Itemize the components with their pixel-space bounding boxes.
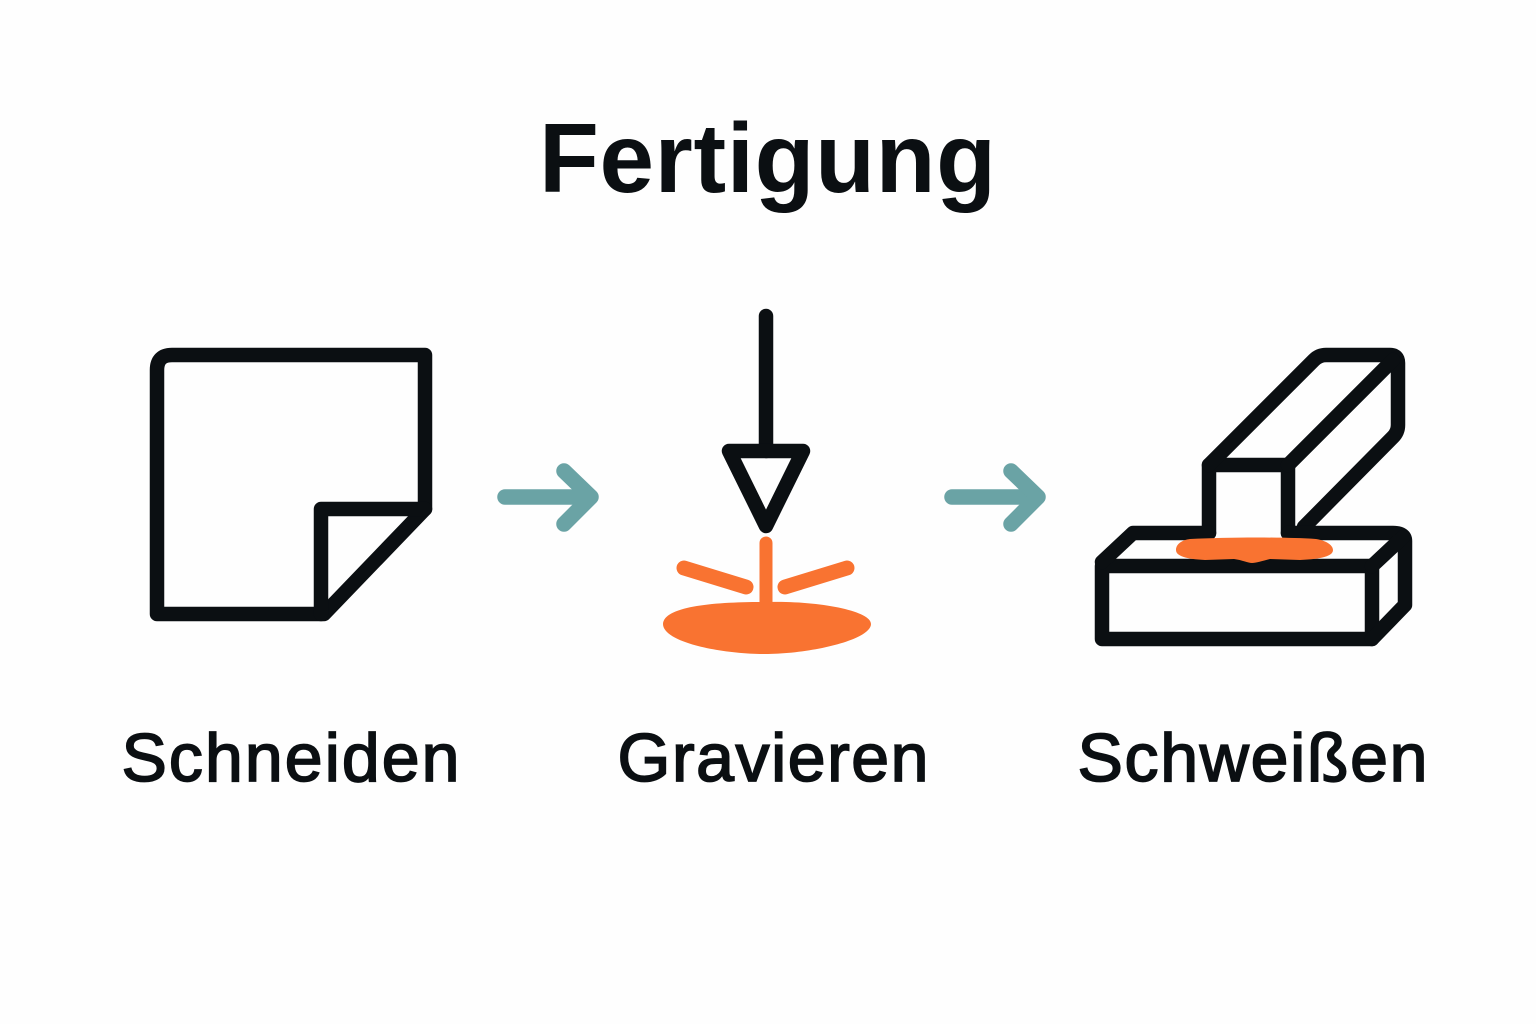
arrow: Gravieren to Schweißen bbox=[952, 471, 1038, 524]
lower block bbox=[1102, 533, 1405, 639]
icon: engraving tool with orange sparks bbox=[663, 316, 871, 654]
label: Schweißen: Schweißen bbox=[1078, 720, 1428, 796]
title: Fertigung bbox=[539, 103, 996, 213]
icon: cut sheet with folded corner bbox=[157, 355, 425, 614]
upper bar bbox=[1209, 355, 1398, 533]
label: Schneiden: Schneiden bbox=[122, 720, 460, 796]
engraving tool arrow bbox=[729, 316, 803, 526]
icon: welding two metal blocks bbox=[1102, 355, 1405, 639]
label: Gravieren: Gravieren bbox=[618, 720, 928, 796]
orange sparks and melt pool bbox=[663, 537, 871, 654]
orange weld seam bbox=[1176, 538, 1333, 563]
arrow: Schneiden to Gravieren bbox=[505, 471, 591, 524]
